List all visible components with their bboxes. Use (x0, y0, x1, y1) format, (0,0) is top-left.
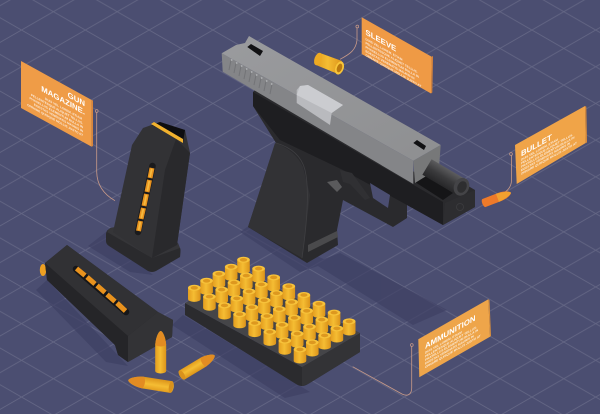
connector: bullet (493, 153, 512, 199)
body text: ammunition: EGESTAS VENENATIS MAURIS IN (425, 334, 474, 366)
magazine body (113, 122, 190, 258)
body text: gun magazine: PHASELLUS ELEMENTUM BULLA IN (30, 96, 84, 130)
body text: sleeve: ORNARE QUISQUE MOLLIS JUSTO AT (366, 53, 421, 88)
magazine bullet tip (40, 264, 46, 276)
body text: gun magazine: ORNARE QUISQUE MOLLIS JUSTO AT (27, 103, 83, 137)
body text: ammunition: PELLENTESQUE ALIQUET TELLUS. (425, 325, 477, 359)
frame upper strip (253, 92, 443, 225)
heading: gun magazine: GUN (68, 90, 85, 108)
magazine slot with cartridges (76, 268, 126, 312)
body text: gun magazine: PELLENTESQUE ALIQUET TELLUS. (31, 93, 83, 125)
heading: bullet: BULLET (521, 131, 553, 158)
body text: gun magazine: DUIS VEL LOREM. ETIAM (45, 97, 82, 121)
loose cartridge: lying left (127, 374, 175, 393)
cartridges in tray (188, 257, 356, 364)
gun (222, 36, 475, 263)
magazine slot with cartridges (138, 166, 152, 232)
connector: sleeve (340, 25, 359, 59)
body text: gun magazine: EGESTAS VENENATIS MAURIS IN (34, 103, 84, 134)
gun frame (248, 85, 475, 263)
trigger (340, 170, 370, 200)
loose cartridge: lying right (177, 351, 217, 381)
body text: sleeve: EGESTAS VENENATIS MAURIS IN (366, 49, 415, 81)
thumb lever (327, 180, 342, 192)
rear sight (247, 44, 263, 56)
body text: sleeve: PELLENTESQUE ALIQUET TELLUS. (366, 41, 418, 74)
card: sleeve (362, 17, 433, 93)
card: bullet (515, 106, 587, 184)
magazine base (106, 228, 180, 272)
front sight (413, 140, 426, 150)
connector: gun magazine (95, 110, 115, 201)
shadows on floor (36, 225, 447, 398)
trigger guard opening (370, 183, 390, 208)
magazine opening (151, 122, 185, 143)
body text: bullet: PELLENTESQUE ALIQUET TELLUS. (521, 133, 573, 165)
body text: bullet: DUIS VEL LOREM. ETIAM (521, 138, 558, 162)
front rail block (415, 176, 475, 225)
body text: ammunition: ORNARE QUISQUE MOLLIS JUSTO AT (425, 334, 481, 369)
body text: bullet: PHASELLUS ELEMENTUM BULLA IN (521, 135, 575, 169)
body text: sleeve: PHASELLUS ELEMENTUM BULLA IN (366, 45, 419, 79)
flying bullet (481, 189, 512, 208)
gun grip panel (248, 143, 310, 258)
body text: bullet: ORNARE QUISQUE MOLLIS JUSTO AT (521, 141, 577, 176)
ammunition tray (185, 257, 360, 386)
card: gun magazine: MAGAZINE. (41, 83, 85, 117)
gun slide (222, 36, 441, 184)
magazine body (45, 245, 173, 362)
body text: ammunition: PHASELLUS ELEMENTUM BULLA IN (425, 328, 479, 362)
slide dots (231, 59, 273, 85)
slide serrations (229, 60, 272, 94)
body text: sleeve: DUIS VEL LOREM. ETIAM (366, 37, 403, 62)
body text: sleeve (366, 37, 421, 88)
ejected sleeve (312, 52, 346, 76)
card: gun magazine (21, 61, 93, 147)
card: ammunition (418, 299, 491, 377)
loose cartridge: standing (155, 331, 166, 374)
heading: ammunition: AMMUNITION (425, 313, 475, 351)
body text: ammunition: DUIS VEL LOREM. ETIAM (425, 330, 462, 355)
connector: ammunition (353, 344, 413, 395)
body text: gun magazine (27, 87, 84, 138)
upright magazine (106, 122, 190, 272)
lying magazine (40, 245, 173, 362)
barrel (422, 159, 472, 198)
ejection port (297, 85, 343, 125)
heading: sleeve: SLEEVE (366, 27, 397, 54)
body text: bullet: EGESTAS VENENATIS MAURIS IN (521, 141, 571, 172)
